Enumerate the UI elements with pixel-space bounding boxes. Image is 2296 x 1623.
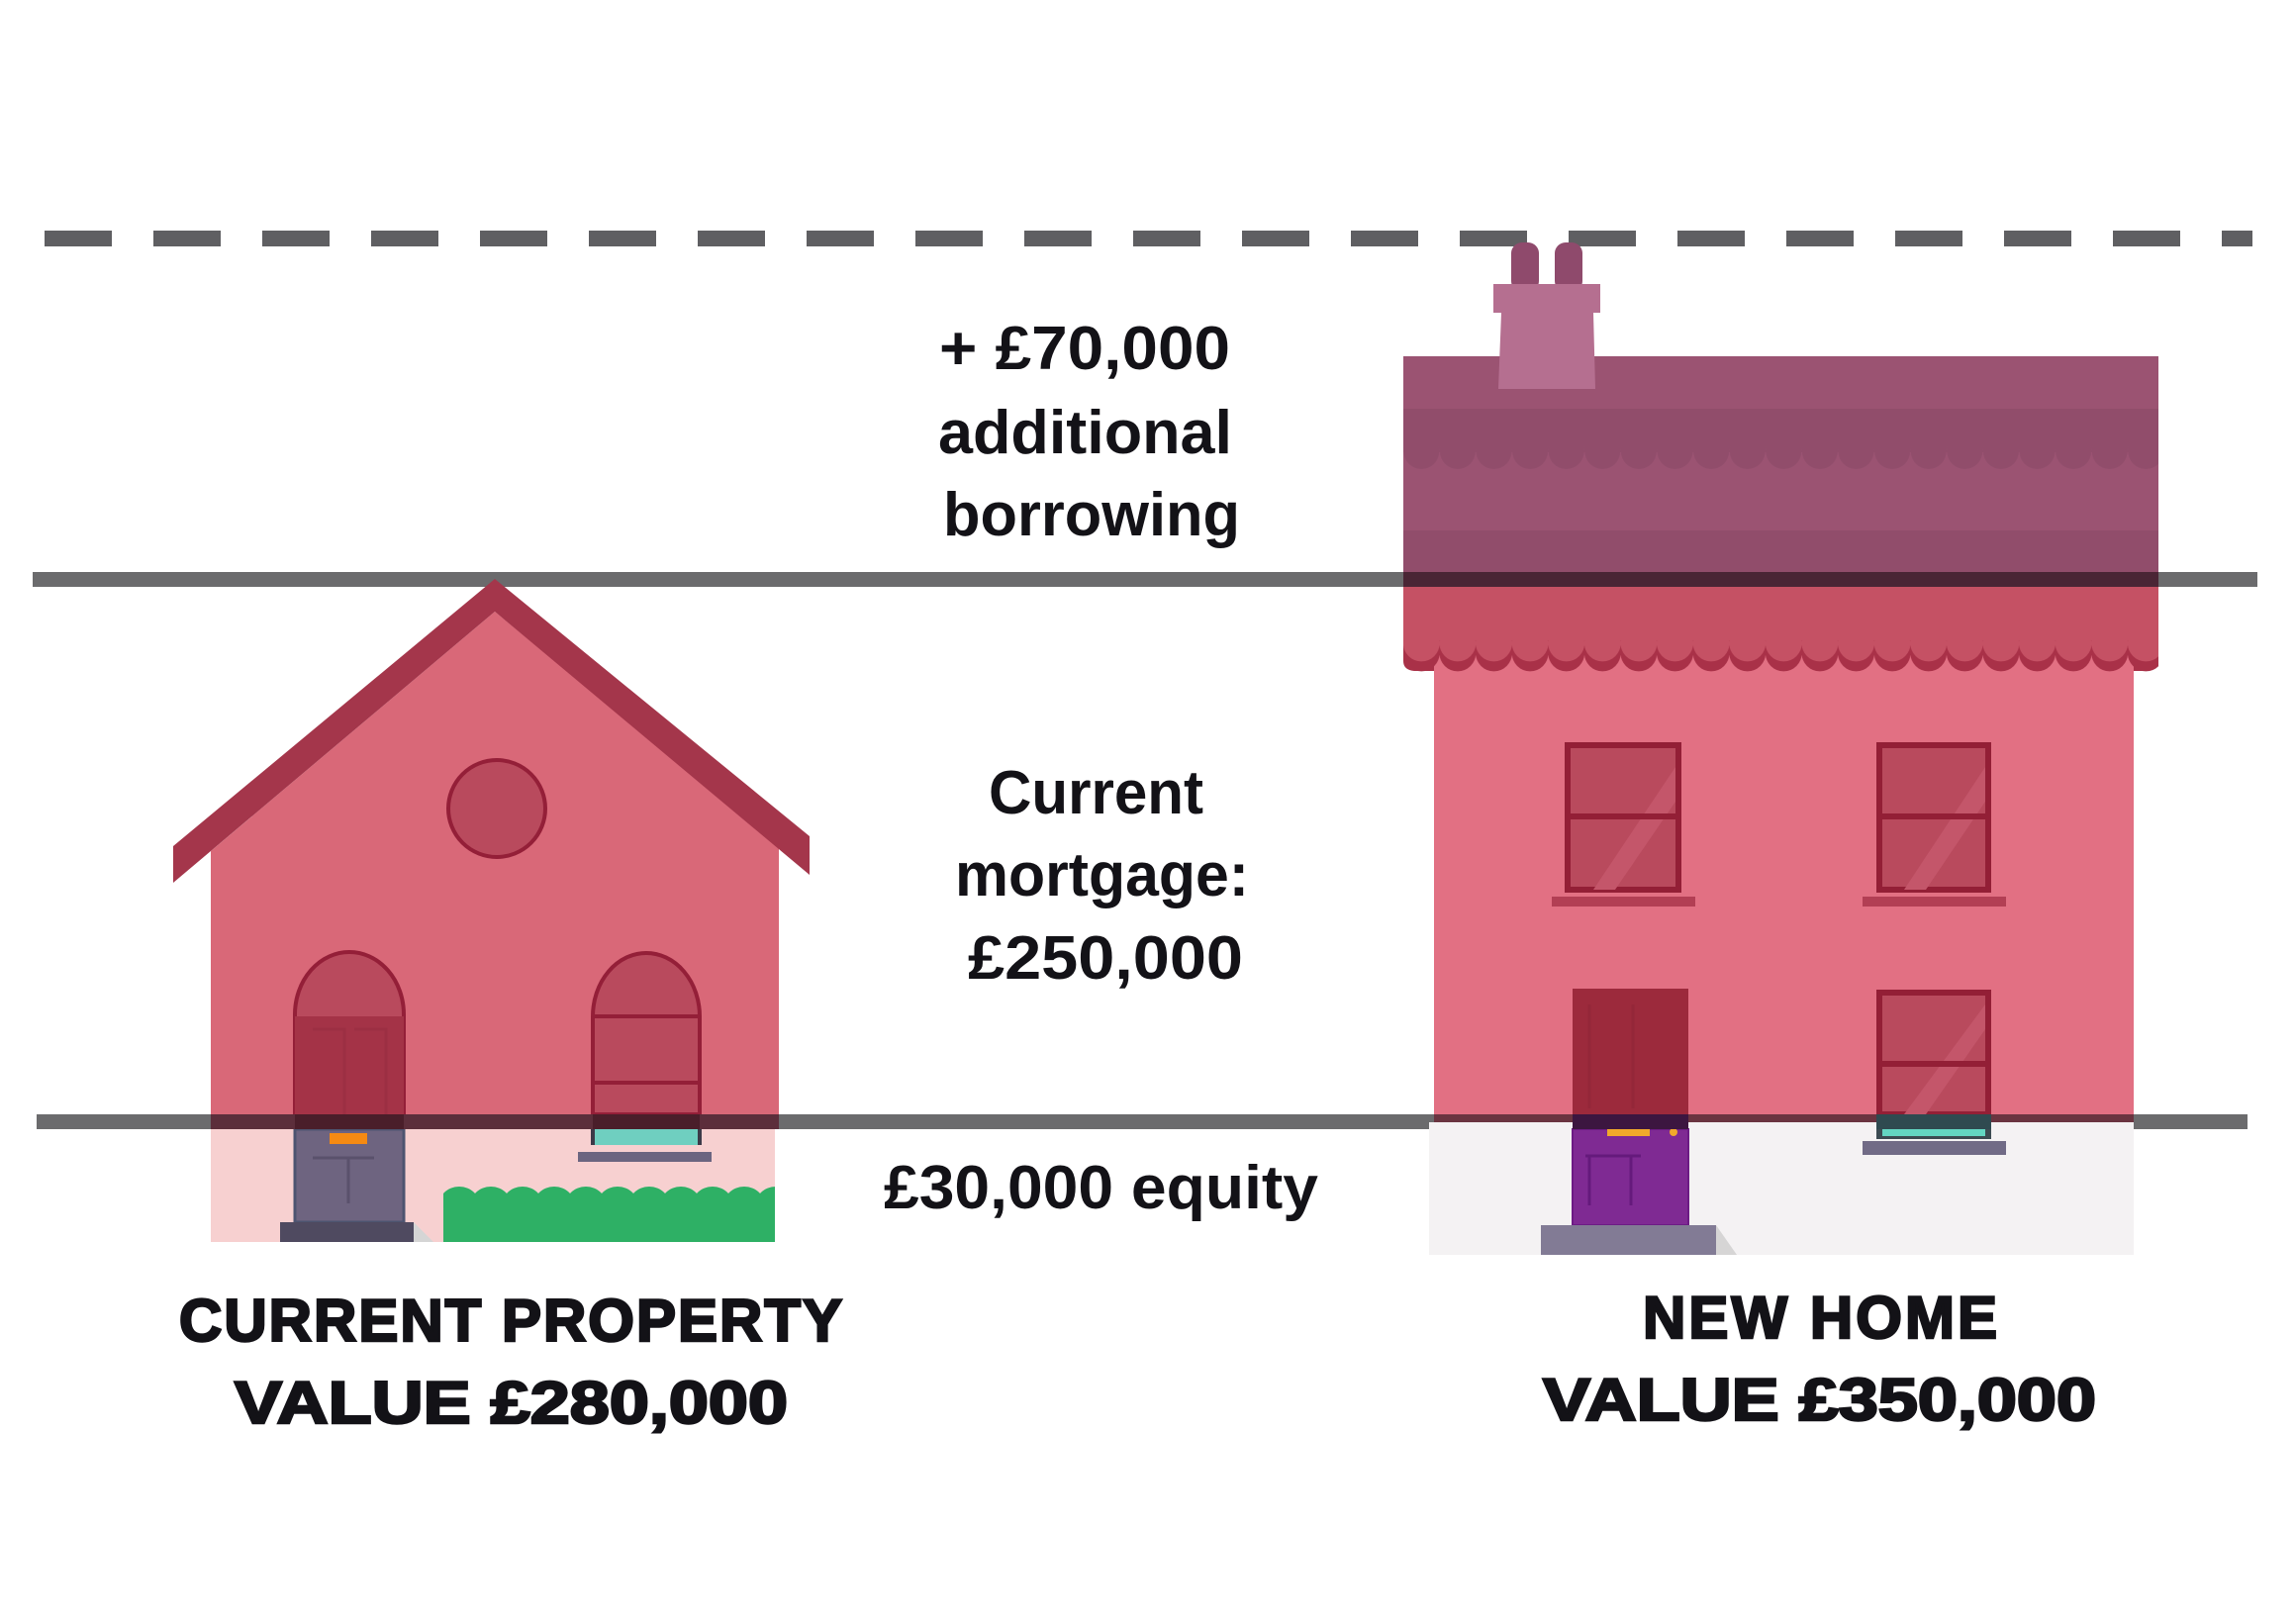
callout: equity: £30,000 equity <box>884 1154 1319 1222</box>
round window <box>448 760 545 857</box>
arched window <box>578 953 712 1162</box>
label: new home <box>1543 1285 2096 1433</box>
line: current mortgage level <box>37 1114 2248 1129</box>
front door, arched <box>295 952 404 1222</box>
dashed line: new home value level <box>45 231 2252 246</box>
label: current property: CURRENT PROPERTY <box>179 1288 842 1354</box>
callout: additional borrowing: borrowing <box>943 481 1240 549</box>
line: current mortgage plus borrowing level <box>33 572 2257 587</box>
label: new home: VALUE £350,000 <box>1543 1367 2096 1433</box>
lower right window <box>1863 993 2006 1155</box>
callout: current mortgage: £250,000 <box>968 924 1243 993</box>
callout: additional borrowing: additional <box>938 399 1232 467</box>
callout: current mortgage: Current <box>989 759 1203 827</box>
label: current property: VALUE £280,000 <box>235 1370 788 1436</box>
front door <box>1573 989 1688 1225</box>
lower wall, equity zone <box>1429 1122 2134 1255</box>
label: current property <box>179 1288 842 1436</box>
house: new home <box>1403 242 2158 1255</box>
label: new home: NEW HOME <box>1643 1285 1997 1351</box>
door step <box>280 1222 433 1242</box>
chimney stack <box>1498 313 1595 389</box>
roof <box>1403 356 2158 673</box>
roof <box>173 579 810 883</box>
callout: current mortgage: mortgage: <box>955 841 1249 909</box>
hedge <box>443 1187 775 1242</box>
upper left window <box>1552 745 1695 907</box>
upper wall, mortgage zone <box>211 612 779 1114</box>
chimney pots and cap <box>1493 242 1600 313</box>
overlap of lines with walls <box>211 572 2158 1129</box>
upper right window <box>1863 745 2006 907</box>
callout: current mortgage <box>955 759 1249 993</box>
callout: additional borrowing <box>938 315 1240 549</box>
upper wall, mortgage zone <box>1434 643 2134 1114</box>
callout: additional borrowing: + £70,000 <box>939 315 1230 383</box>
door step <box>1541 1225 1737 1255</box>
lower wall, equity zone <box>211 1129 775 1242</box>
house: current property <box>173 579 810 1242</box>
